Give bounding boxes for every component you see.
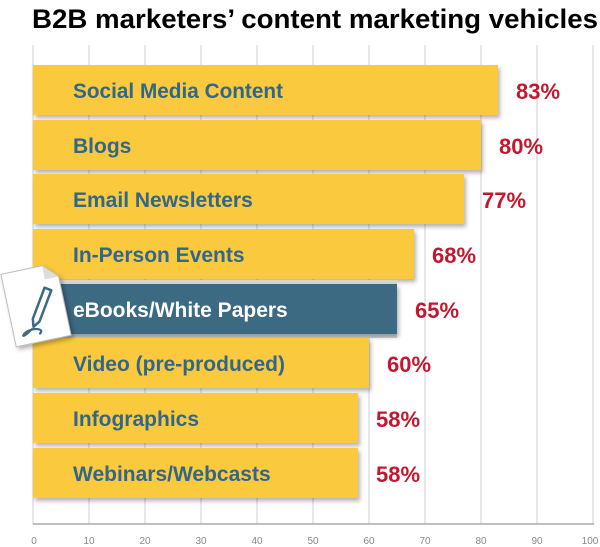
axis labels: 60 <box>363 536 375 547</box>
bar: Blogs <box>33 120 543 170</box>
bar: Webinars/Webcasts <box>33 448 420 498</box>
bar: Email Newsletters <box>33 174 526 224</box>
bar: Webinars/Webcasts: 58% <box>376 462 420 487</box>
bar: Video: Video (pre-produced) <box>73 353 285 376</box>
axis labels: 30 <box>195 536 207 547</box>
bar: eBooks/White Papers (highlighted) <box>33 280 459 338</box>
bar: Blogs: 80% <box>499 134 543 159</box>
bar: Video <box>33 338 431 388</box>
bar: Infographics: 58% <box>376 407 420 432</box>
axis labels: 0 <box>31 536 37 547</box>
icon: paper with pencil <box>1 263 71 347</box>
axis labels: 50 <box>307 536 319 547</box>
axis labels: 90 <box>531 536 543 547</box>
axis labels: 10 <box>83 536 95 547</box>
axis labels: 40 <box>251 536 263 547</box>
bar chart <box>33 65 560 498</box>
bar: Video: 60% <box>387 352 431 377</box>
bar: Infographics: Infographics <box>73 408 199 431</box>
bar: Infographics <box>33 393 420 443</box>
bar: Email Newsletters: Email Newsletters <box>73 189 253 212</box>
bar: Social Media Content: 83% <box>516 79 560 104</box>
bar: eBooks/White Papers (highlighted): eBooks/White Papers <box>73 299 288 322</box>
bar: Webinars/Webcasts: Webinars/Webcasts <box>73 463 271 486</box>
bar: Social Media Content: Social Media Content <box>73 80 283 103</box>
bar: Email Newsletters: 77% <box>482 188 526 213</box>
bar: eBooks/White Papers (highlighted): 65% <box>415 298 459 323</box>
axis labels: 20 <box>139 536 151 547</box>
bar: In-Person Events <box>33 229 476 279</box>
axis line <box>33 523 594 525</box>
axis labels: 70 <box>419 536 431 547</box>
bar: Social Media Content <box>33 65 560 115</box>
axis labels <box>31 536 599 547</box>
title: B2B marketers’ content marketing vehicles <box>32 4 598 34</box>
bar: In-Person Events: 68% <box>432 243 476 268</box>
bar: Blogs: Blogs <box>73 135 131 158</box>
axis labels: 100 <box>582 536 599 547</box>
axis labels: 80 <box>475 536 487 547</box>
bar: In-Person Events: In-Person Events <box>73 244 245 267</box>
